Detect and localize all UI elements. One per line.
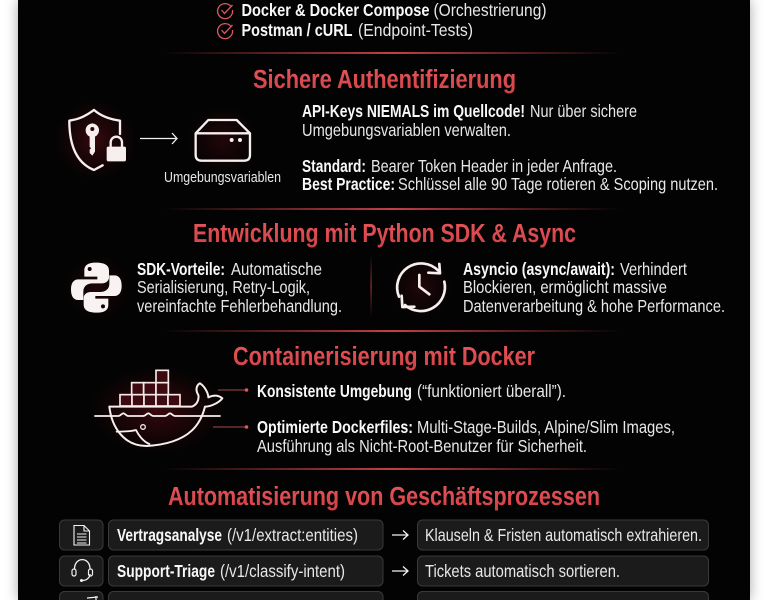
leader line 1 <box>218 388 248 392</box>
box: endpoint <box>108 556 383 586</box>
box: outcome <box>418 520 708 550</box>
row: Support-Triage <box>60 556 708 586</box>
text: consistent environment: Konsistente Umgebung <box>257 381 412 401</box>
text block: SDK: Serialisierung, Retry-Logik, <box>137 277 310 297</box>
row: Vertragsanalyse <box>60 520 708 550</box>
text: optimized dockerfiles: Ausführung als Nicht-Root-Benutzer für Sicherheit. <box>257 436 587 456</box>
icon: async clock <box>388 254 454 321</box>
box: outcome: Tickets automatisch sortieren. <box>425 561 620 581</box>
text: optimized dockerfiles: Optimierte Dockerfiles: <box>257 417 413 437</box>
text block: authentication <box>302 101 718 194</box>
icon: headset <box>60 556 103 586</box>
text block: authentication: Best Practice: <box>302 174 395 194</box>
text: consistent environment <box>257 381 566 401</box>
text block: asyncio: Datenverarbeitung & hohe Performance. <box>463 296 725 316</box>
icon: python logo <box>61 253 131 323</box>
text block: SDK: Automatische <box>231 259 322 279</box>
text block: asyncio: Blockieren, ermöglicht massive <box>463 277 667 297</box>
heading: Automatisierung: Automatisierung von Geschäftsprozessen <box>168 483 600 511</box>
icon: chart <box>60 592 103 600</box>
tool: Docker: (Orchestrierung) <box>434 0 546 20</box>
arrow <box>392 530 408 540</box>
text block: authentication: API-Keys NIEMALS im Quellcode! <box>302 101 525 121</box>
text block: authentication: Bearer Token Header in jeder Anfrage. <box>371 156 617 176</box>
icon: check Docker <box>218 4 233 19</box>
box: endpoint <box>108 592 383 600</box>
icon: docker whale <box>87 365 227 455</box>
tool checklist <box>218 0 546 40</box>
arrow <box>392 566 408 576</box>
text block: asyncio <box>463 259 725 316</box>
text block: authentication: Umgebungsvariablen verwalten. <box>302 120 511 140</box>
box: outcome: Klauseln & Fristen automatisch extrahieren. <box>425 525 702 545</box>
box: outcome <box>418 592 708 600</box>
box: endpoint <box>108 520 383 550</box>
box: endpoint: (/v1/classify-intent) <box>220 561 345 581</box>
icon: storage box <box>186 103 259 177</box>
tool: Postman <box>242 20 473 40</box>
text: consistent environment: (“funktioniert überall”). <box>417 381 566 401</box>
heading: Entwicklung: Entwicklung mit Python SDK & Async <box>193 220 576 248</box>
tool: Postman: Postman / cURL <box>242 20 353 40</box>
tool: Docker: Docker & Docker Compose <box>242 0 430 20</box>
box: endpoint: Support-Triage <box>117 561 215 581</box>
heading: Containerisierung: Containerisierung mit Docker <box>233 343 535 371</box>
icon: shield with key and lock <box>53 98 137 182</box>
box: outcome <box>418 556 708 586</box>
box: endpoint: Vertragsanalyse <box>117 525 222 545</box>
box: endpoint: (/v1/extract:entities) <box>227 525 358 545</box>
text block: asyncio: Asyncio (async/await): <box>463 259 615 279</box>
text block: authentication: Standard: <box>302 156 366 176</box>
text block: SDK: SDK-Vorteile: <box>137 259 225 279</box>
row: Finanzanalyse (cropped) <box>60 592 708 600</box>
label: Umgebungsvariablen: Umgebungsvariablen <box>164 169 281 186</box>
icon: document <box>60 520 103 550</box>
tool: Postman: (Endpoint-Tests) <box>358 20 473 40</box>
text block: SDK <box>137 259 342 316</box>
text block: SDK: vereinfachte Fehlerbehandlung. <box>137 296 342 316</box>
text: optimized dockerfiles <box>257 417 675 456</box>
text block: authentication: Nur über sichere <box>530 101 637 121</box>
text block: asyncio: Verhindert <box>620 259 687 279</box>
icon: check Postman <box>218 24 233 39</box>
arrow: key to vault <box>140 133 177 144</box>
text: optimized dockerfiles: Multi-Stage-Builds, Alpine/Slim Images, <box>417 417 675 437</box>
heading: Sichere Authentifizierung: Sichere Authentifizierung <box>253 66 516 94</box>
leader line 2 <box>213 425 248 429</box>
